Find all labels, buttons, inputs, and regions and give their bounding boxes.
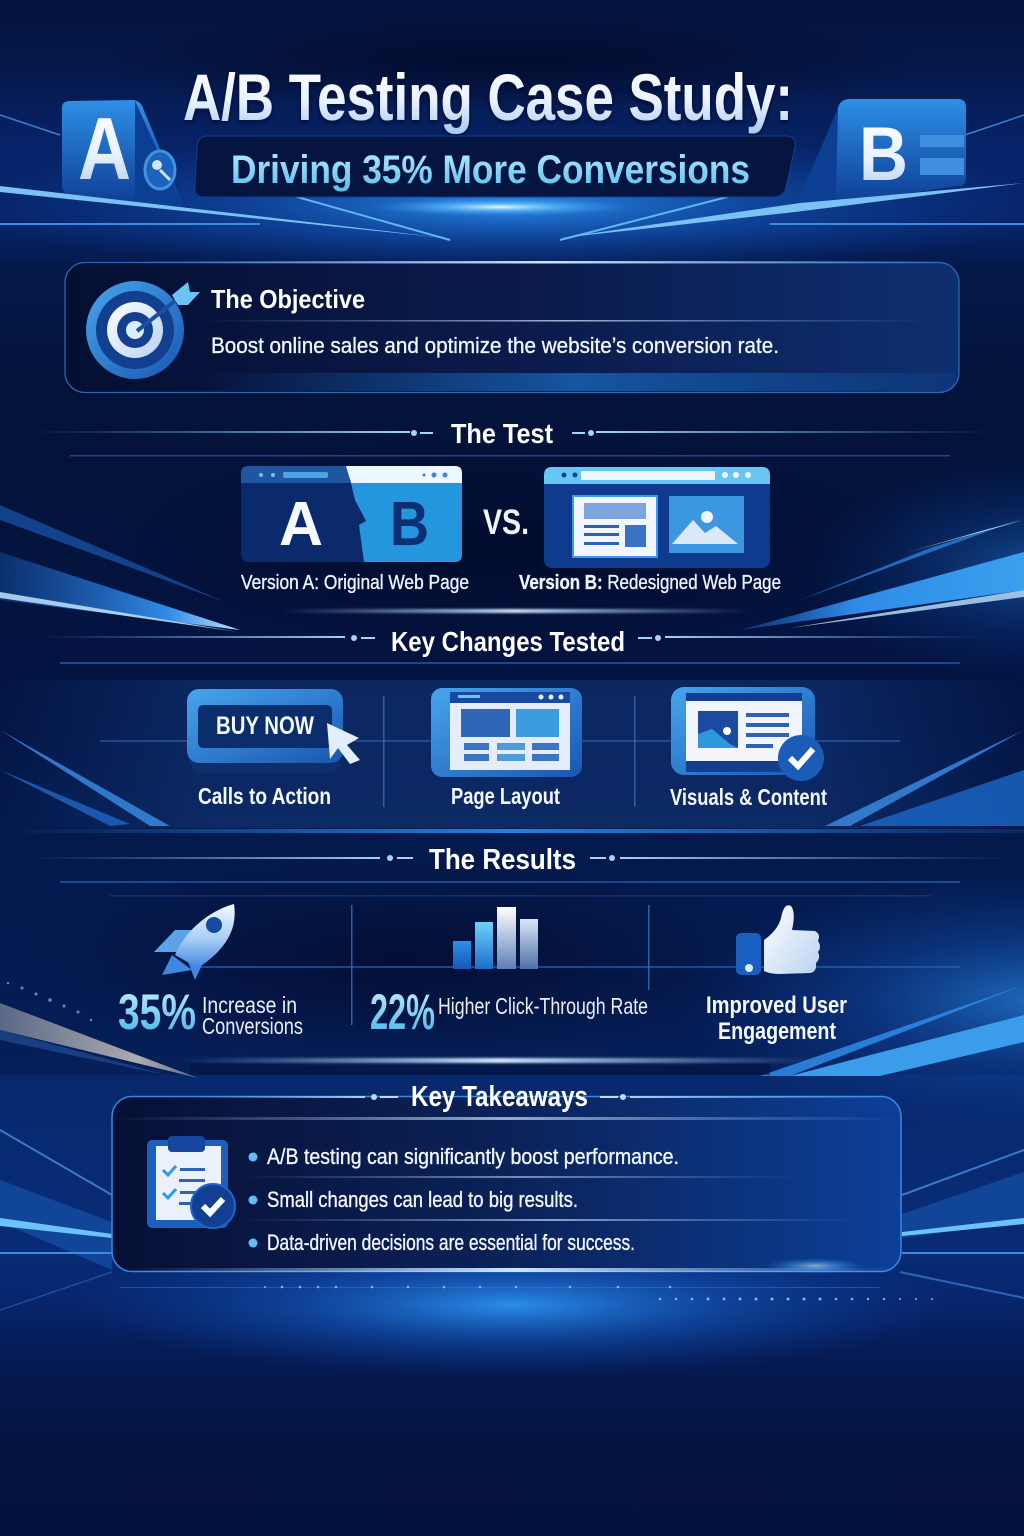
heading: The Results: The Results — [429, 844, 576, 876]
icon: page layout — [431, 688, 582, 777]
stat: engagement — [706, 992, 847, 1045]
subtitle pill — [195, 136, 795, 197]
label: page layout: Page Layout — [451, 783, 560, 809]
divider glow — [180, 1058, 820, 1063]
divider dark — [190, 1063, 770, 1075]
stat label: Higher Click-Through Rate — [438, 993, 648, 1019]
divider — [648, 905, 650, 990]
label: calls to action: Calls to Action — [198, 783, 331, 809]
light rays — [0, 505, 1024, 1310]
card: version A — [241, 466, 462, 562]
results band — [110, 895, 930, 896]
stat: 22%: 22% — [370, 984, 435, 1040]
icon: B tile — [795, 99, 966, 208]
icon: B tile: B — [859, 112, 908, 197]
card: version B — [544, 467, 770, 568]
bottom dotted lines — [120, 1286, 933, 1300]
divider — [383, 696, 384, 807]
panel: objective — [65, 261, 960, 392]
icon: clipboard — [147, 1136, 235, 1228]
heading: Key Changes Tested — [40, 626, 985, 664]
icon: thumbs up — [736, 905, 820, 975]
divider glow — [0, 829, 1024, 833]
icon: rocket — [154, 904, 235, 980]
divider — [351, 905, 352, 1025]
icon: A tile: A — [78, 99, 131, 198]
heading: The Test: The Test — [451, 418, 553, 449]
panel: key takeaways — [112, 1096, 901, 1274]
dots decoration — [7, 982, 92, 1021]
title: A/B Testing Case Study: — [183, 60, 793, 134]
icon: visuals and content — [671, 687, 824, 781]
takeaway 1: A/B testing can significantly boost performance. — [267, 1144, 679, 1169]
objective text: Boost online sales and optimize the website’s conversion rate. — [211, 333, 779, 358]
label: visuals and content: Visuals & Content — [670, 784, 827, 810]
heading: Key Changes Tested: Key Changes Tested — [391, 626, 625, 657]
results line — [200, 966, 960, 968]
divider — [634, 696, 636, 807]
chart: bars — [453, 907, 538, 969]
stat: engagement: Improved User — [706, 992, 847, 1019]
takeaway 3: Data-driven decisions are essential for success. — [267, 1230, 635, 1255]
stat: engagement: Engagement — [718, 1018, 836, 1045]
card: version A: A — [279, 490, 323, 559]
stat: 35%: 35% — [118, 984, 196, 1040]
heading: Key Takeaways — [190, 1081, 890, 1113]
icon: target — [86, 281, 200, 379]
divider glow — [280, 609, 750, 613]
header light streaks — [0, 115, 1024, 240]
header foreground streaks — [0, 183, 1024, 238]
band line — [100, 740, 900, 742]
text: vs: VS. — [483, 503, 529, 542]
takeaway 2: Small changes can lead to big results. — [267, 1187, 578, 1212]
objective heading: The Objective — [211, 284, 365, 314]
card: version A: B — [390, 490, 429, 559]
heading: The Test — [30, 418, 996, 456]
icon: buy now button — [187, 689, 360, 773]
stat label — [202, 992, 303, 1039]
stat label: Increase in — [202, 992, 297, 1018]
icon: A tile — [62, 99, 185, 210]
heading: Key Takeaways: Key Takeaways — [411, 1081, 588, 1113]
subtitle: Driving 35% More Conversions — [231, 148, 750, 192]
caption: version B: Version B: Redesigned Web Page — [519, 572, 781, 594]
heading: The Results — [30, 844, 1010, 883]
stat label: Conversions — [202, 1013, 303, 1039]
icon: buy now button: BUY NOW — [216, 712, 314, 740]
caption: version A: Version A: Original Web Page — [241, 572, 469, 594]
